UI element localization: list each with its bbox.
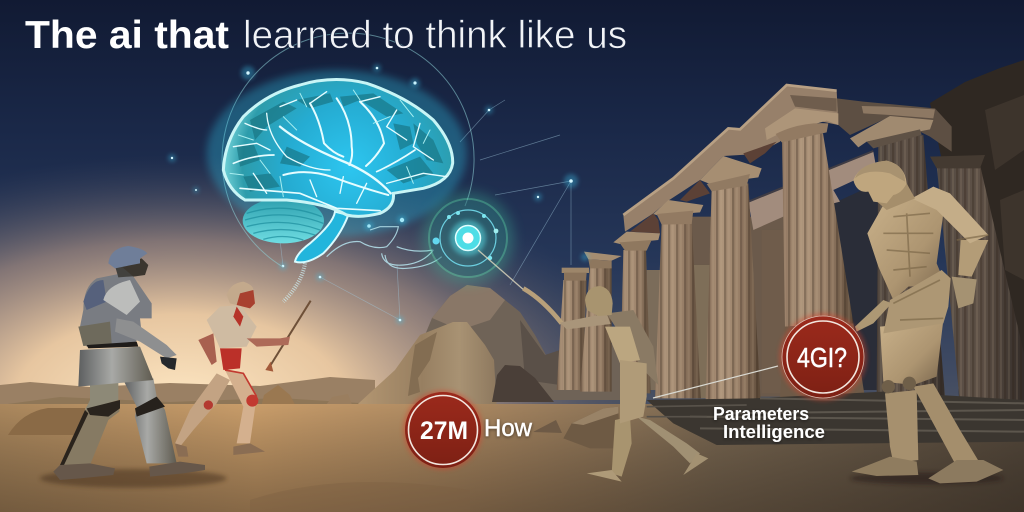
torso <box>867 197 945 300</box>
back columns <box>877 135 1024 403</box>
light beam from orb to figure's hand <box>478 250 525 291</box>
title: learned to think like us <box>243 14 627 57</box>
badge: 27M <box>403 390 483 470</box>
thighs <box>880 320 943 385</box>
smoky mound <box>425 285 640 400</box>
column four capital <box>613 232 660 251</box>
helmet, neck and face <box>108 246 148 277</box>
thin orbit arc around brain <box>222 33 474 267</box>
rear foot <box>683 453 708 475</box>
head and neck <box>853 161 915 210</box>
rock cliff on the right <box>930 60 1024 420</box>
back capital <box>850 116 933 148</box>
glowing orb node <box>422 192 514 284</box>
temple interior <box>647 183 893 398</box>
callout line to 4GI badge <box>653 366 778 398</box>
brain halo <box>207 70 467 237</box>
label: How: How <box>484 415 533 442</box>
neural strands from brain to orb <box>327 227 442 268</box>
cerebellum <box>243 198 324 243</box>
muscle lines <box>883 213 988 320</box>
striding statue figure <box>523 286 708 482</box>
dark boulder <box>492 365 554 402</box>
pyramid rock <box>347 322 497 416</box>
left foot <box>852 457 918 476</box>
title: The ai that <box>25 14 229 57</box>
torso <box>207 305 257 370</box>
entablature and capitals <box>613 85 952 251</box>
beam shadow underside <box>630 142 777 233</box>
ground shadow <box>40 469 227 488</box>
front columns <box>557 133 865 400</box>
staff held up <box>523 288 562 323</box>
knees <box>882 377 916 393</box>
feet <box>53 462 205 480</box>
inner lit beam <box>748 151 877 230</box>
left leg <box>885 390 918 463</box>
right beam <box>837 98 952 152</box>
front foot <box>587 470 622 482</box>
badge value: 4GI? <box>797 342 847 373</box>
column one capital <box>765 95 838 142</box>
head <box>227 282 255 308</box>
darker cells of cortex <box>237 93 443 192</box>
arm and gauntlet <box>115 318 177 370</box>
badge value: 27M <box>420 417 468 445</box>
armoured skirt <box>78 347 153 387</box>
main front beam <box>623 85 838 232</box>
ground: sand plain <box>0 404 1024 512</box>
legs <box>60 378 177 465</box>
front leg <box>612 417 632 477</box>
right leg <box>913 383 980 467</box>
rear leg <box>637 417 700 463</box>
cape <box>607 310 658 385</box>
staff <box>265 301 311 372</box>
small rocks <box>320 394 355 413</box>
torso <box>605 327 640 363</box>
near forearm and hand <box>952 240 988 308</box>
column three capital <box>653 200 703 225</box>
legs <box>175 370 265 457</box>
beam top edge <box>623 85 837 215</box>
glowing brain <box>207 70 467 302</box>
arms <box>198 333 290 365</box>
brain cortex <box>223 80 453 216</box>
label: Parameters: Parameters <box>713 404 809 424</box>
large armoured statue <box>850 161 1003 484</box>
torso and shoulder <box>80 272 152 347</box>
constellation lines and stars <box>168 64 589 324</box>
figure with red-highlighted armour holding staff <box>175 282 311 457</box>
statue shadow <box>850 472 1003 484</box>
right foot <box>928 460 1003 483</box>
temple with columns <box>557 133 1024 448</box>
broken stone block <box>563 407 620 448</box>
temple steps <box>647 392 1024 445</box>
brain stem <box>283 212 348 302</box>
small mound near figure <box>258 385 302 420</box>
arm <box>560 313 611 329</box>
far forearm <box>855 300 892 332</box>
head <box>585 286 613 316</box>
label: Intelligence: Intelligence <box>723 422 825 442</box>
shoulder plate <box>912 187 988 243</box>
hips and belt <box>883 270 951 333</box>
bright fold lines <box>230 90 447 211</box>
column two capital <box>700 156 762 191</box>
distant hills and boulders <box>0 285 640 420</box>
hips <box>620 360 647 423</box>
knight in steel armour <box>40 246 227 488</box>
badge: 4GI? <box>779 313 867 401</box>
belt and pouches <box>78 322 138 348</box>
